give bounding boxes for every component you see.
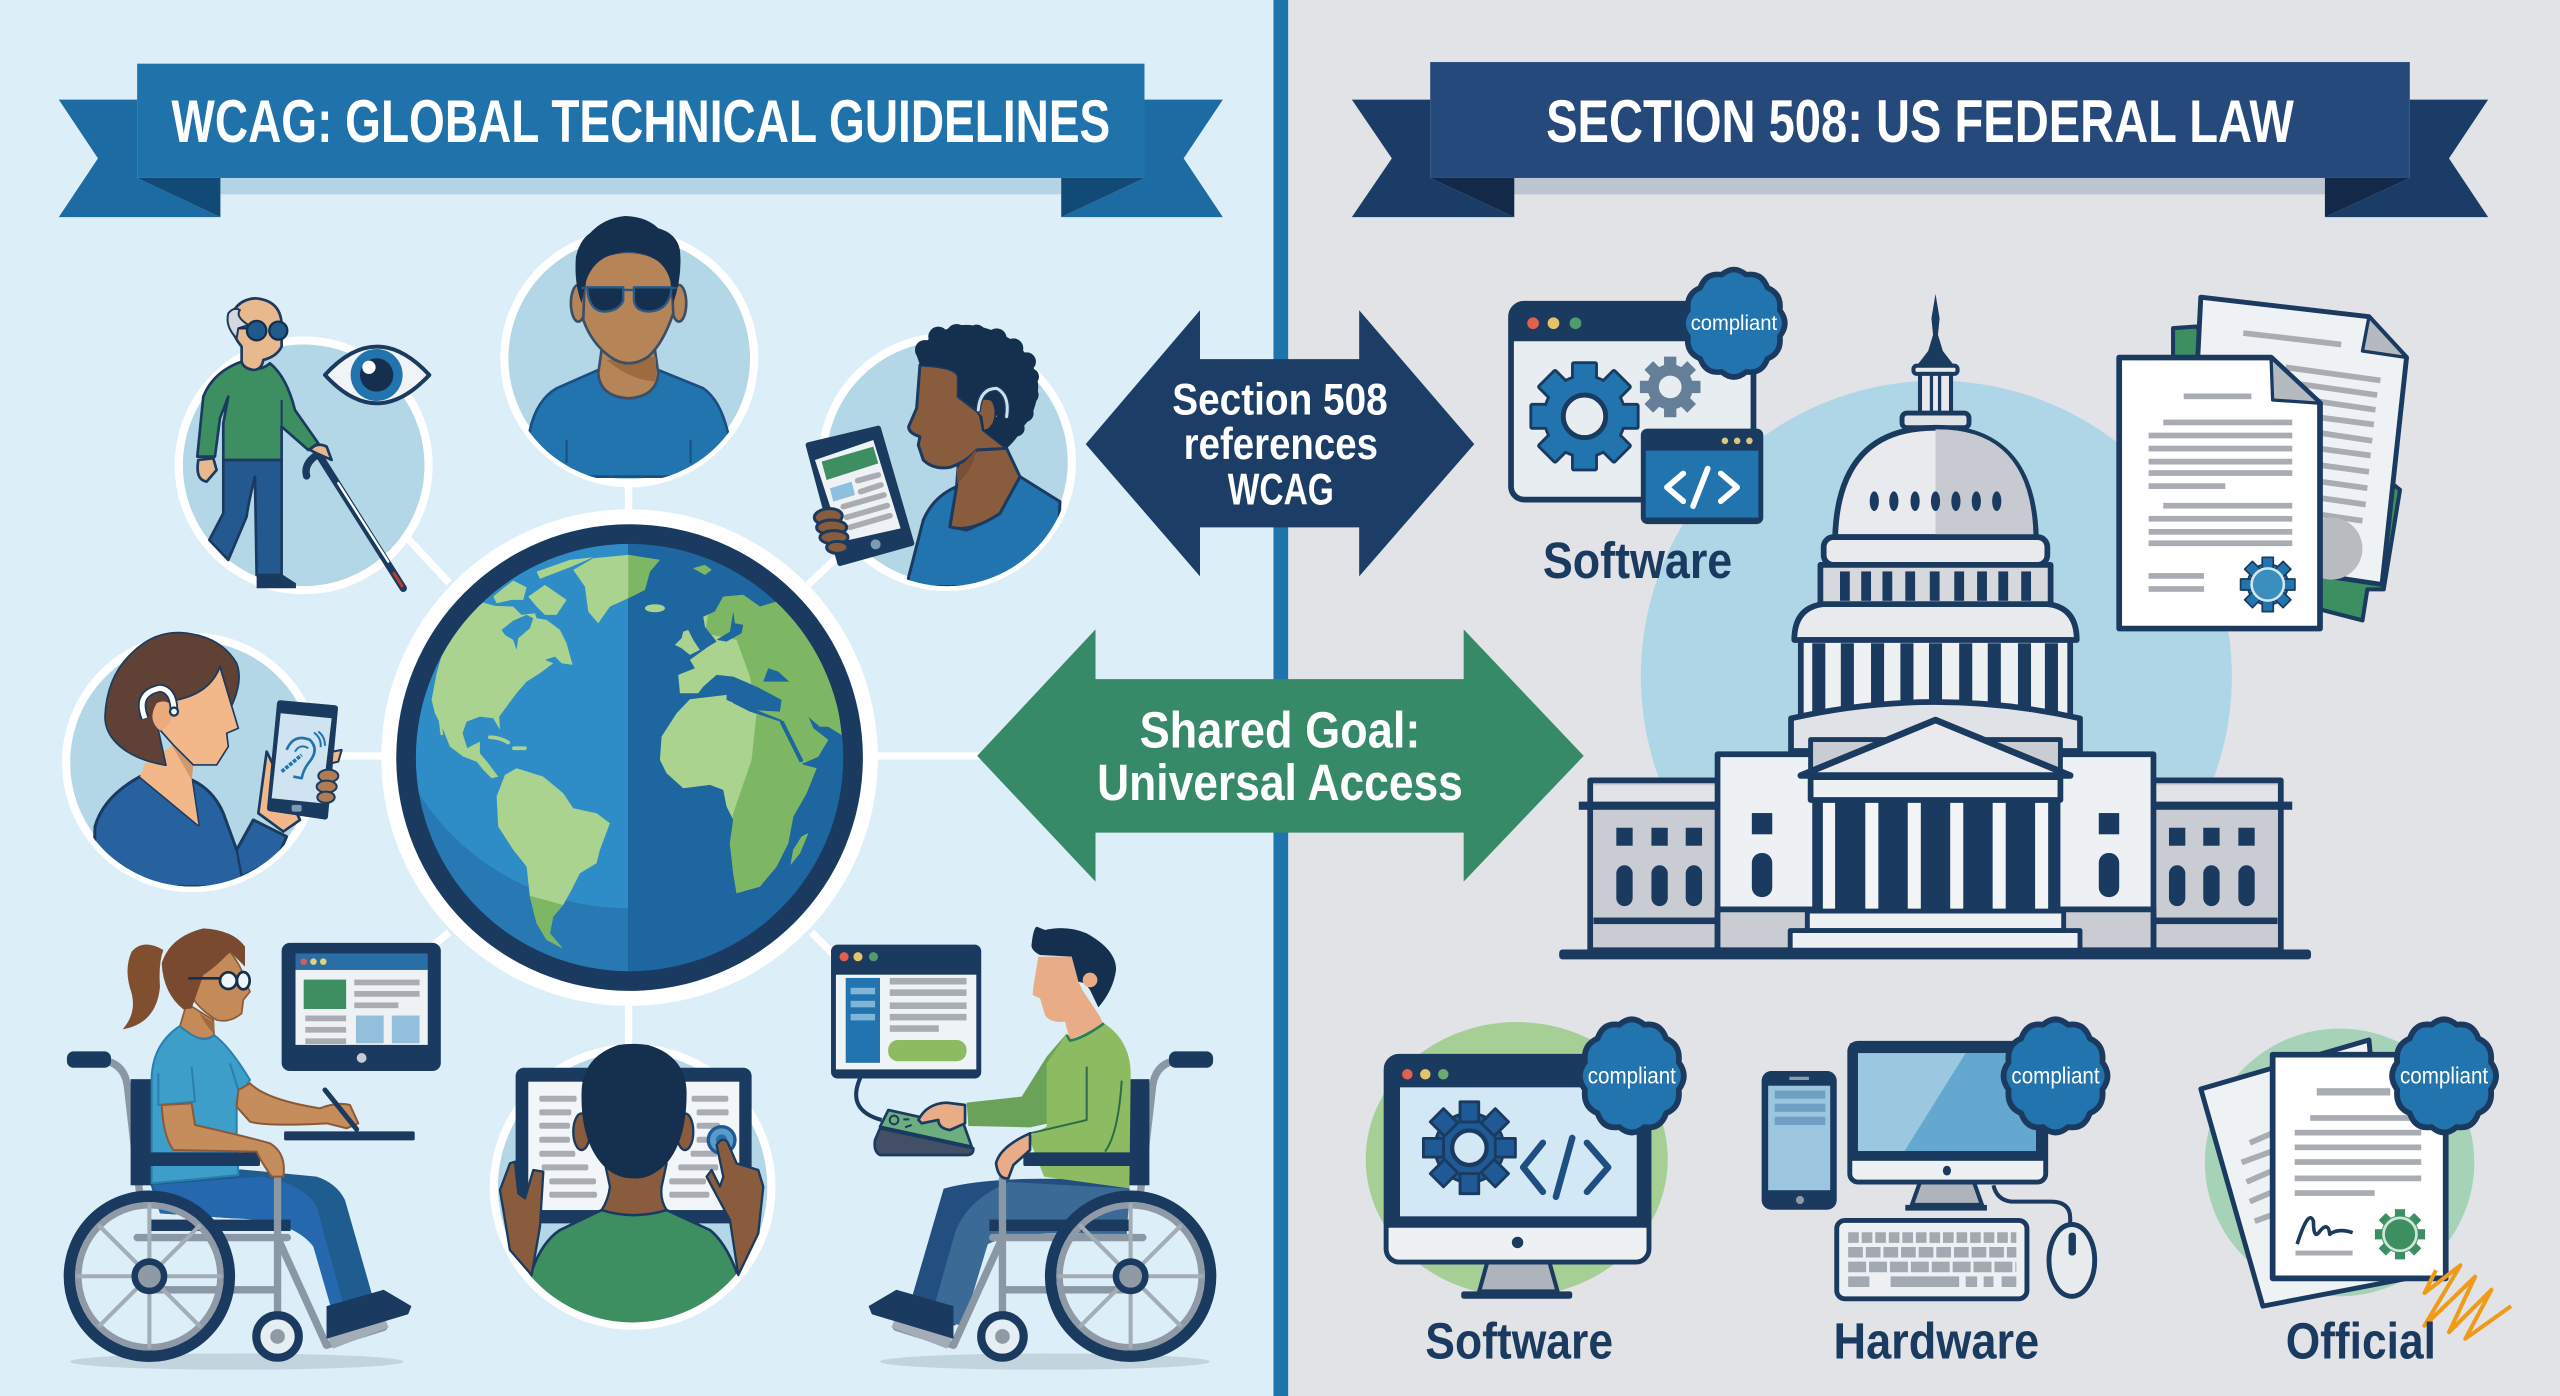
icon: gear xyxy=(1423,1102,1515,1194)
icon: blue seal xyxy=(2241,557,2295,612)
left wing xyxy=(1579,780,1721,950)
left pavilion xyxy=(1718,754,1819,950)
label: Hardware: Hardware xyxy=(1833,1312,2039,1369)
desk shelf xyxy=(284,1131,415,1140)
background: Section 508 panel xyxy=(1288,0,2560,1396)
background: WCAG panel xyxy=(0,0,1273,1396)
person: cane user xyxy=(179,298,429,590)
label: Official: Official xyxy=(2286,1312,2436,1369)
arrow: shared goal: Universal Access xyxy=(1097,754,1463,811)
icon: large gear xyxy=(1532,364,1637,469)
globe xyxy=(381,509,878,1006)
center divider xyxy=(1273,0,1288,1396)
icon: sunglasses xyxy=(582,287,677,312)
person: hearing aid with tablet xyxy=(808,324,1072,587)
label: Software: Software xyxy=(1425,1312,1613,1369)
right hand xyxy=(707,1140,763,1275)
backdrop circle behind Capitol xyxy=(1641,381,2232,790)
icon: mouse xyxy=(1993,1185,2095,1296)
arrow: shared goal xyxy=(977,629,1584,882)
right pavilion xyxy=(2052,754,2153,950)
title: WCAG: WCAG: GLOBAL TECHNICAL GUIDELINES xyxy=(171,87,1110,155)
icon group: hardware xyxy=(1762,1019,2108,1369)
icon: small gear xyxy=(1640,357,1701,417)
icon: phone with ear xyxy=(270,703,342,817)
base line xyxy=(1559,950,2311,959)
orange scribble xyxy=(2424,1265,2511,1339)
icon: wheelchair xyxy=(67,1051,384,1358)
badge: compliant: compliant xyxy=(1588,1062,1676,1088)
icon: wheelchair xyxy=(896,1051,1213,1358)
icon: tablet screen xyxy=(282,943,441,1071)
label: Software: Software xyxy=(1543,532,1732,589)
person: woman with phone xyxy=(66,633,342,888)
software icon, upper xyxy=(1511,270,1785,589)
icon: desktop monitor xyxy=(1850,1043,2046,1211)
oceans and inner seas xyxy=(439,604,802,762)
badge: compliant: compliant xyxy=(1691,311,1777,335)
dome xyxy=(1791,294,2080,751)
icon: web window xyxy=(831,945,981,1079)
Capitol building xyxy=(1559,294,2311,959)
screen xyxy=(516,1068,752,1223)
arrow: shared goal: Shared Goal: xyxy=(1140,702,1420,759)
person: top, sunglasses xyxy=(504,216,754,483)
badge: compliant xyxy=(1683,270,1785,377)
icon: glasses xyxy=(188,972,250,989)
badge: compliant xyxy=(2392,1019,2496,1132)
right wing xyxy=(2150,780,2292,950)
icon: eye xyxy=(325,347,429,403)
badge: compliant xyxy=(1580,1019,1684,1132)
icon: code symbol xyxy=(1523,1138,1608,1197)
icon: phone xyxy=(1762,1071,1837,1210)
arrow: Section 508 references WCAG: WCAG xyxy=(1228,465,1334,514)
arrow: Section 508 references WCAG: references xyxy=(1184,420,1378,469)
title: Section 508: SECTION 508: US FEDERAL LAW xyxy=(1546,87,2294,155)
icon: dark glasses xyxy=(238,321,287,340)
icon: keyboard xyxy=(1837,1220,2027,1299)
icon: keypad xyxy=(875,1110,973,1155)
banner: WCAG heading xyxy=(59,64,1223,217)
arrow: Section 508 references WCAG: Section 508 xyxy=(1172,376,1388,425)
person: wheelchair user with tablet xyxy=(67,928,441,1370)
icon: hearing aid xyxy=(142,688,178,718)
document stack xyxy=(2119,297,2407,629)
badge: compliant: compliant xyxy=(2400,1062,2489,1088)
icon: tablet xyxy=(808,428,912,563)
banner: Section 508 heading xyxy=(1352,62,2488,217)
icon: green seal xyxy=(2375,1209,2425,1259)
icon: stylus xyxy=(325,1090,357,1129)
icon: code window xyxy=(1641,429,1763,524)
badge: compliant: compliant xyxy=(2011,1062,2100,1088)
portico xyxy=(1790,720,2080,950)
connector lines around globe xyxy=(335,483,988,1053)
icon: white cane xyxy=(306,454,403,588)
icon group: software monitor xyxy=(1366,1019,1684,1369)
icon group: official documents xyxy=(2201,1019,2511,1369)
badge: compliant xyxy=(2004,1019,2108,1132)
icon: touch point xyxy=(708,1127,735,1153)
person: touch screen user, bottom centre xyxy=(494,1044,771,1330)
arrow: Section 508 references WCAG xyxy=(1086,310,1474,576)
person: wheelchair user with keypad xyxy=(831,927,1213,1370)
signature xyxy=(2297,1218,2353,1244)
icon: hearing aid xyxy=(978,388,1007,417)
left hand xyxy=(500,1162,543,1275)
